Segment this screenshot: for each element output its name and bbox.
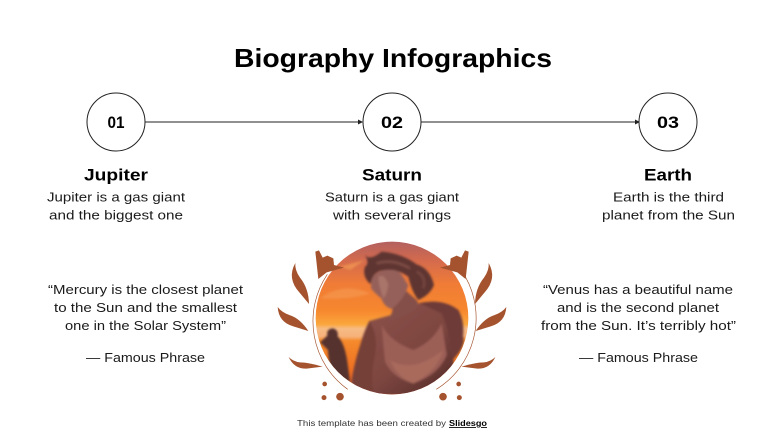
timeline arrow 2 (421, 120, 640, 124)
column: Saturn (325, 166, 459, 222)
sunset statue image (313, 240, 470, 397)
column: Jupiter: and the biggest one (49, 208, 183, 222)
step 01 marker (87, 93, 145, 151)
timeline arrow 1 (145, 120, 363, 124)
right quote (541, 282, 736, 365)
frame arc left (313, 274, 348, 389)
right leaves (439, 250, 506, 400)
left quote: to the Sun and the smallest (54, 300, 237, 315)
column: Jupiter (47, 166, 185, 222)
frame arc right (436, 277, 476, 389)
column: Saturn: Saturn is a gas giant (325, 190, 459, 204)
statue neck (390, 290, 420, 316)
column: Saturn: Saturn (362, 166, 422, 184)
left quote: “Mercury is the closest planet (48, 282, 243, 297)
statue face (371, 269, 408, 309)
footer credit: Slidesgo (449, 418, 487, 428)
right quote: “Venus has a beautiful name (543, 282, 733, 297)
statue hair (364, 252, 434, 300)
left quote: one in the Solar System” (65, 318, 226, 333)
right quote: from the Sun. It’s terribly hot” (541, 318, 736, 333)
column: Earth: planet from the Sun (602, 208, 735, 222)
step 03 marker: 03 (657, 113, 679, 132)
right quote: and is the second planet (557, 300, 719, 315)
portrait with floral frame (278, 240, 506, 400)
footer credit (297, 418, 487, 428)
footer credit: This template has been created by (297, 418, 447, 428)
step 02 marker: 02 (381, 113, 403, 132)
column: Earth: Earth is the third (613, 190, 724, 204)
step 01 marker: 01 (108, 113, 124, 132)
column: Jupiter: Jupiter is a gas giant (47, 190, 185, 204)
column: Earth: Earth (644, 166, 692, 184)
step 03 marker (639, 93, 697, 151)
left leaves (278, 250, 344, 400)
left quote: — Famous Phrase (86, 350, 205, 365)
background statue (320, 328, 350, 382)
statue draped body (350, 302, 464, 395)
right quote: — Famous Phrase (579, 350, 698, 365)
left quote (48, 282, 243, 365)
column: Jupiter: Jupiter (84, 166, 148, 184)
step 02 marker (363, 93, 421, 151)
column: Saturn: with several rings (332, 208, 452, 222)
title: Biography Infographics (234, 43, 552, 73)
column: Earth (602, 166, 735, 222)
